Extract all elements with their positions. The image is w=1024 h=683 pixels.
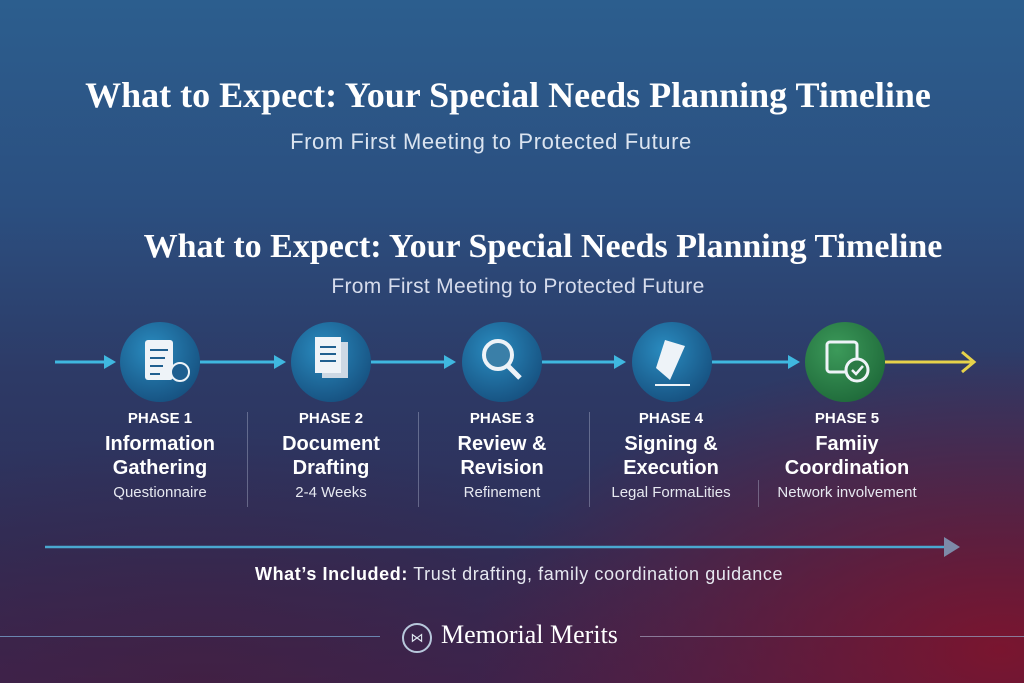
timeline arrows and icons — [55, 322, 976, 402]
phase 3: Review & — [458, 433, 546, 455]
icon: calendar check — [805, 322, 885, 402]
phase 3: Revision — [460, 457, 544, 479]
phase 5: Famiiy — [815, 433, 879, 455]
phase 4: PHASE 4 — [639, 410, 703, 427]
icon: magnifier — [462, 322, 542, 402]
icon: document — [291, 322, 371, 402]
phase 4: Signing & — [624, 433, 718, 455]
phase 5: PHASE 5 — [815, 410, 879, 427]
footer logo: Memorial Merits — [441, 620, 618, 649]
phase 4: Legal FormaLities — [611, 484, 731, 501]
footer logo: ⋈ — [410, 630, 424, 645]
subtitle: From First Meeting to Protected Future — [290, 129, 692, 154]
phase 1 — [105, 410, 215, 501]
phase 1: PHASE 1 — [128, 410, 192, 427]
phase 2 — [282, 410, 380, 501]
bottom arrow — [45, 537, 960, 557]
phase 2: Document — [282, 433, 380, 455]
arrows — [55, 355, 800, 369]
footer logo — [0, 620, 1024, 653]
icon: pen — [632, 322, 712, 402]
title: What to Expect: Your Special Needs Planning Timeline — [85, 75, 931, 115]
phase 5: Coordination — [785, 457, 909, 479]
phase 2: 2-4 Weeks — [295, 484, 367, 501]
phase 3 — [458, 410, 546, 501]
phase 1: Questionnaire — [113, 484, 207, 501]
phase 4: Execution — [623, 457, 719, 479]
phase 3: Refinement — [464, 484, 540, 501]
phase 1: Gathering — [113, 457, 207, 479]
second title: What to Expect: Your Special Needs Planning Timeline — [144, 228, 942, 265]
phase 2: PHASE 2 — [299, 410, 363, 427]
icon: clipboard — [120, 322, 200, 402]
phase 1: Information — [105, 433, 215, 455]
included text: What’s Included: Trust drafting, family coordination guidance — [255, 564, 783, 584]
phase 3: PHASE 3 — [470, 410, 534, 427]
second subtitle: From First Meeting to Protected Future — [331, 275, 705, 298]
phase 5 — [777, 410, 917, 501]
phase 5: Network involvement — [777, 484, 917, 501]
phase 4 — [611, 410, 731, 501]
phase 2: Drafting — [293, 457, 369, 479]
